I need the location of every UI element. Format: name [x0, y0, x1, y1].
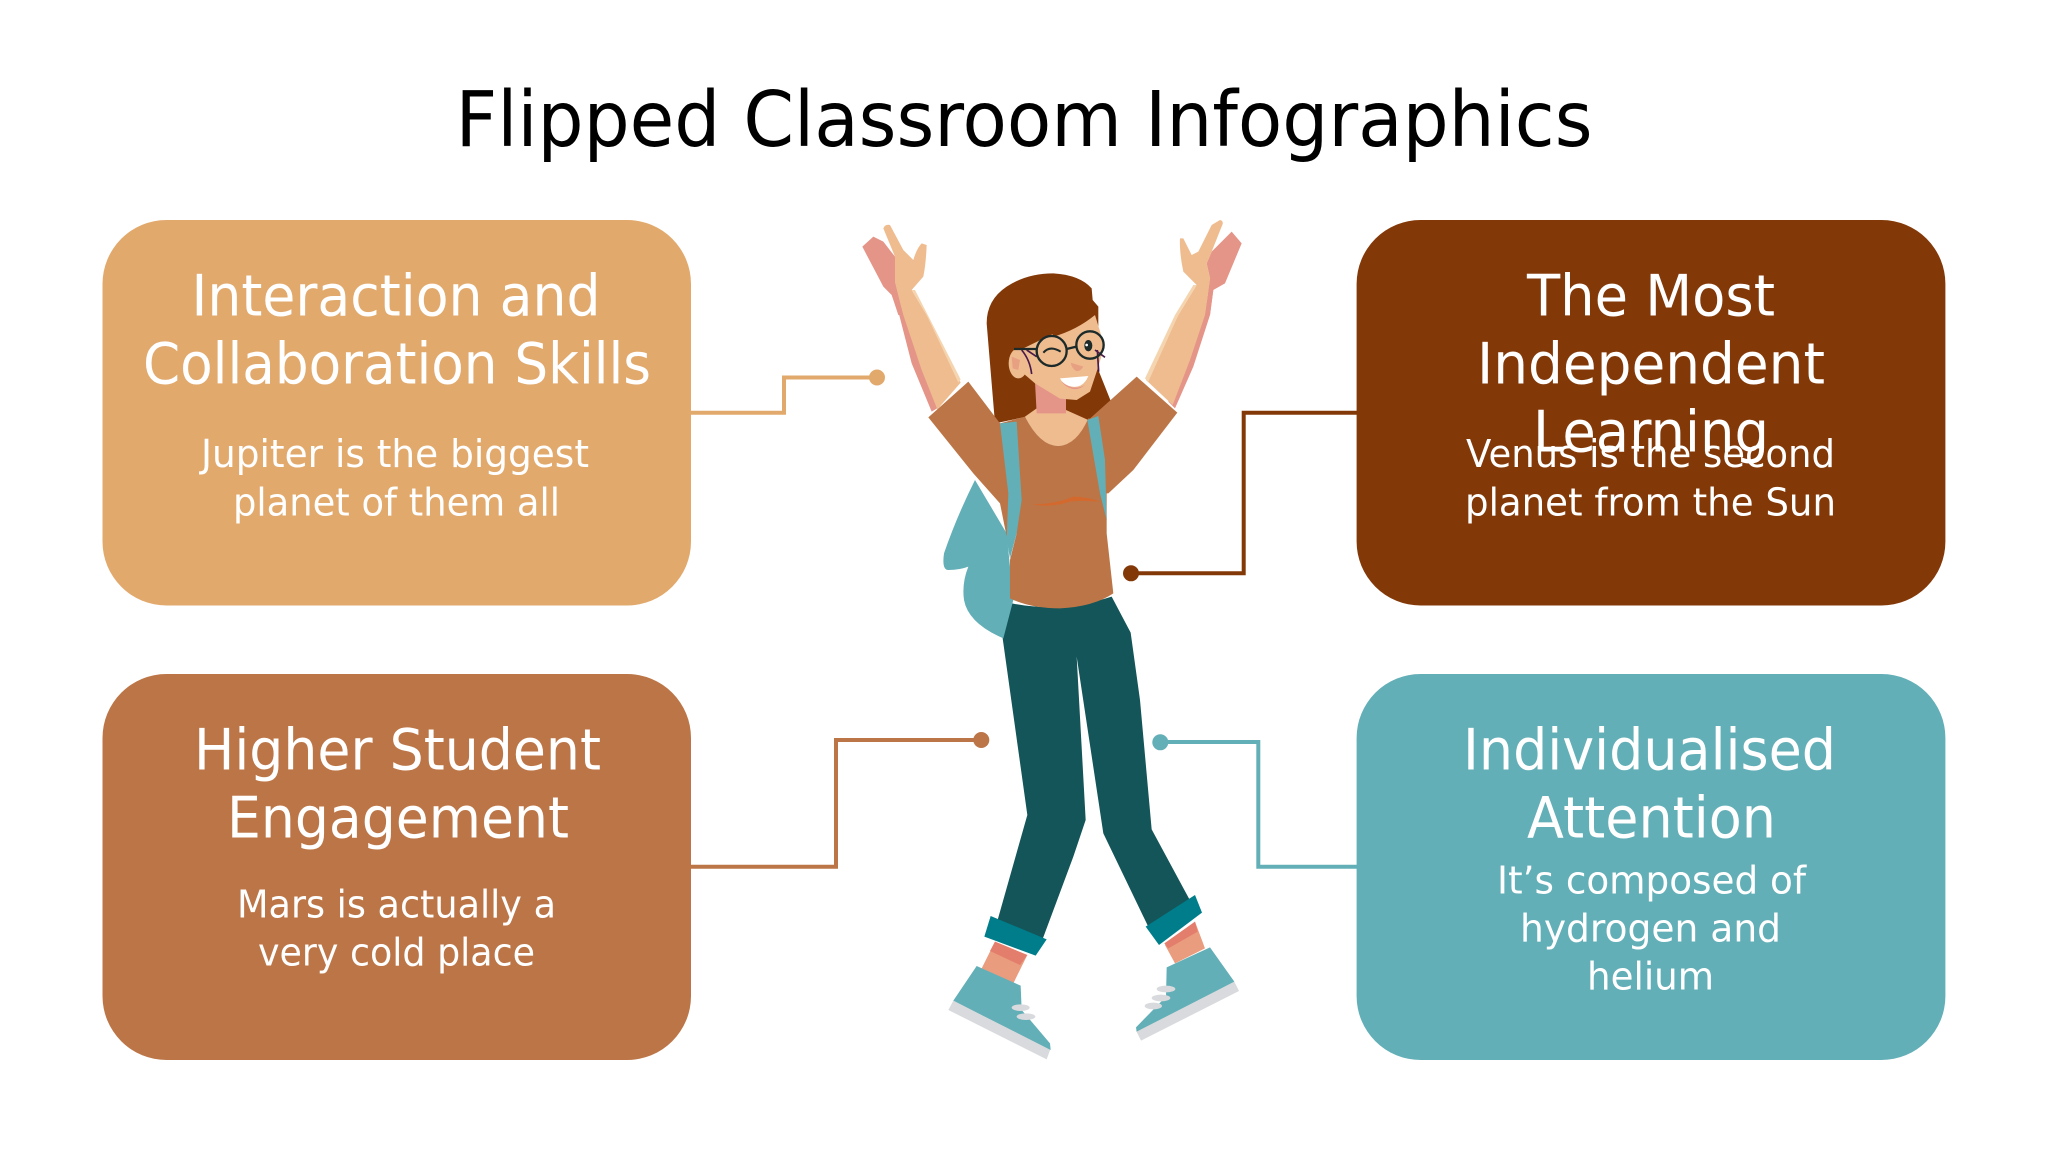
panel heading: Engagement — [227, 786, 569, 852]
mouth — [1060, 376, 1088, 389]
left shoe — [948, 966, 1051, 1059]
panel text — [1465, 432, 1836, 524]
panel: interaction and collaboration skills — [102, 220, 691, 606]
upper body — [862, 220, 1242, 638]
panel heading — [1477, 264, 1825, 466]
shirt wrinkle — [1032, 497, 1100, 506]
panel: higher student engagement — [102, 674, 691, 1060]
panel text: Venus is the second — [1466, 432, 1835, 476]
nose — [1071, 363, 1083, 371]
panel: the most independent learning — [1357, 220, 1945, 606]
panel text: planet of them all — [233, 480, 560, 524]
panel text — [1497, 858, 1808, 998]
panel heading: The Most — [1526, 264, 1775, 330]
panel: individualised attention — [1357, 674, 1945, 1060]
panel text — [237, 882, 556, 974]
right arm — [1145, 278, 1213, 408]
connector: top left — [691, 370, 885, 413]
panel text: helium — [1587, 954, 1714, 998]
open eye — [1084, 340, 1092, 351]
panel text: Mars is actually a — [237, 882, 556, 926]
panel heading: Independent — [1477, 332, 1825, 398]
left cuff — [984, 916, 1047, 956]
panel text — [199, 432, 589, 524]
face — [1022, 315, 1103, 400]
panel heading: Attention — [1527, 786, 1776, 852]
panel text: hydrogen and — [1520, 906, 1781, 950]
panel heading: Collaboration Skills — [143, 332, 651, 398]
left arm — [892, 282, 961, 412]
panel heading: Higher Student — [194, 718, 601, 784]
panel heading — [143, 264, 651, 398]
panel heading — [194, 718, 601, 852]
connector: top right — [1123, 413, 1357, 581]
fringe — [1007, 300, 1095, 348]
panel text: planet from the Sun — [1465, 480, 1836, 524]
legs — [948, 597, 1239, 1059]
backpack straps — [1000, 416, 1107, 558]
panel heading: Learning — [1533, 400, 1769, 466]
right shoe — [1136, 947, 1239, 1041]
jeans — [997, 597, 1191, 942]
neck and chest — [1025, 382, 1088, 446]
winking eye — [1043, 349, 1061, 353]
connector: bottom right — [1152, 734, 1357, 867]
panel text: It’s composed of — [1497, 858, 1808, 902]
ear — [1009, 348, 1028, 378]
connector: bottom left — [691, 732, 989, 867]
shirt — [928, 377, 1177, 608]
right cuff — [1146, 895, 1202, 945]
right hand — [1180, 220, 1242, 315]
title: Flipped Classroom Infographics — [456, 76, 1592, 165]
left hand — [862, 225, 927, 315]
panel heading — [1463, 718, 1836, 852]
panel text: very cold place — [258, 930, 535, 974]
hair — [987, 273, 1112, 423]
hair strands — [1022, 350, 1105, 374]
glasses — [1014, 331, 1104, 366]
backpack — [943, 480, 1013, 638]
illustration: student with raised arms — [862, 220, 1242, 1059]
left sock — [982, 942, 1027, 983]
panel heading: Individualised — [1463, 718, 1836, 784]
panel heading: Interaction and — [192, 264, 600, 330]
panel text: Jupiter is the biggest — [199, 432, 589, 476]
right sock — [1164, 922, 1205, 963]
